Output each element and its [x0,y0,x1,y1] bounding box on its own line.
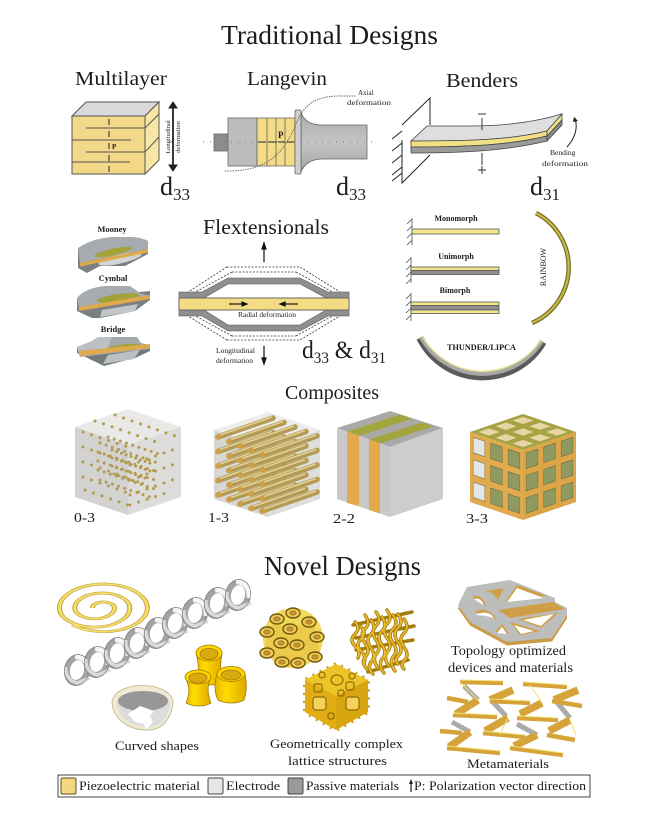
icon: dome [112,686,173,730]
panel: lattice structures [260,608,414,768]
label: 1-3: 1-3 [208,511,229,526]
label: THUNDER/LIPCA: THUNDER/LIPCA [447,343,516,352]
mode: d31: d [530,172,543,201]
panel: Multilayer [72,68,190,204]
mode: d33 and d31: d [302,337,314,364]
mode: d33 and d31: 33 [314,350,329,367]
panel: topology optimized [448,580,573,675]
icon: spiked lattice cube [305,664,368,730]
panel: Flextensionals [179,215,386,367]
icon: helix [62,577,253,688]
arrows: longitudinal deformation [262,243,266,364]
title: Traditional Designs: Traditional Designs [221,20,438,50]
diagram: Cymbal [77,286,150,318]
diagram: Monomorph [407,218,499,245]
panel: Langevin: P [278,130,284,140]
panel: topology optimized: devices and materials [448,660,573,675]
label: bending deformation: Bending [550,148,576,157]
panel: metamaterials [440,680,582,771]
cube body [337,411,443,517]
mode: d33: d [336,172,349,201]
cube body [75,409,181,515]
arrow: longitudinal deformation [169,102,177,171]
heading: Multilayer: Multilayer [75,68,167,90]
icon: spiral [59,584,147,632]
legend label: piezoelectric: Piezoelectric material [79,778,200,793]
legend label: electrode: Electrode [226,778,280,793]
label: 3-3: 3-3 [466,512,488,527]
label: Curved shapes: Curved shapes [115,738,199,753]
label: radial deformation: Radial deformation [238,311,297,319]
heading: Composites: Composites [285,382,379,404]
label: Monomorph: Monomorph [434,214,478,223]
swatch: passive [288,778,303,794]
embedded rods [215,417,317,514]
composite: 2-2 [333,411,443,527]
label: Unimorph: Unimorph [438,252,474,261]
heading: Benders: Benders [446,70,518,92]
panel: flextensional variants [77,224,150,366]
curve: axial deformation [225,96,356,171]
mode: d31: 31 [543,185,560,204]
label: Bimorph: Bimorph [440,286,471,295]
legend [58,775,590,797]
diagram: wall [392,98,430,183]
label: longitudinal deformation: Longitudinal [216,347,255,355]
swatch: piezoelectric [61,778,76,794]
heading: Flextensionals: Flextensionals [203,215,329,239]
label: Mooney: Mooney [97,224,127,234]
icon: polarization arrow [409,779,413,792]
label: Metamaterials: Metamaterials [467,756,549,771]
cube body [470,414,576,520]
diagram: Bimorph [406,293,499,321]
arrows: radial deformation [229,302,298,306]
mode: d33: 33 [173,185,190,204]
diagram: Mooney [78,237,148,273]
panel: Curved shapes [59,577,253,753]
mode: d33: d [160,172,173,201]
diagram: THUNDER/LIPCA arc [420,336,543,377]
label: 0-3: 0-3 [74,511,95,526]
icon: curved cups [185,645,246,706]
legend label: passive: Passive materials [306,778,399,793]
diagram: RAINBOW arc [532,213,569,323]
panel: Multilayer: deformation [175,120,182,153]
label: topology optimized: Topology optimized [451,643,566,658]
label: Bridge: Bridge [101,324,125,334]
heading: Langevin: Langevin [247,68,327,90]
icon: gyroid lattice [352,610,414,674]
diagram: Bridge [77,337,150,366]
panel: Langevin: deformation [347,99,392,107]
legend label: polarization: P: Polarization vector direction [414,778,587,793]
diagram: multilayer stack [72,102,159,174]
mode: d33 and d31: 31 [371,350,386,367]
label: longitudinal deformation: Longitudinal [165,120,172,154]
arrow: bending direction [567,118,576,147]
composite: 0-3 [74,409,181,526]
panel: bender variants [406,213,569,377]
panel: Multilayer: P [112,143,117,151]
label: RAINBOW: RAINBOW [539,247,548,286]
mode: d33 and d31: & d [329,337,371,364]
diagram: Unimorph [406,257,499,284]
diagram: Langevin transducer [214,110,367,174]
icon: zigzag metamaterial [440,680,582,755]
title: Novel Designs: Novel Designs [264,551,421,581]
icon: tubular lattice sphere [260,608,324,668]
icon: topology plate [458,580,567,646]
label: lattice structures: Geometrically complex [270,736,404,751]
panel: Flextensionals: deformation [216,357,254,365]
panel: lattice structures: lattice structures [288,753,387,768]
label: axial deformation: Axial [358,89,374,97]
diagram: flextensional device [179,267,349,340]
panel: Benders: deformation [542,159,588,168]
panel: Langevin [203,68,392,204]
polarity marks [478,114,486,174]
cube body [214,412,320,517]
mode: d33: 33 [349,185,366,204]
panel: Benders [392,70,588,204]
composite: 3-3 [466,414,576,527]
diagram: bending beam [411,114,562,153]
embedded particles [83,415,175,505]
composite: 1-3 [208,412,320,526]
label: Cymbal: Cymbal [99,273,128,283]
swatch: electrode [208,778,223,794]
label: 2-2: 2-2 [333,512,355,527]
